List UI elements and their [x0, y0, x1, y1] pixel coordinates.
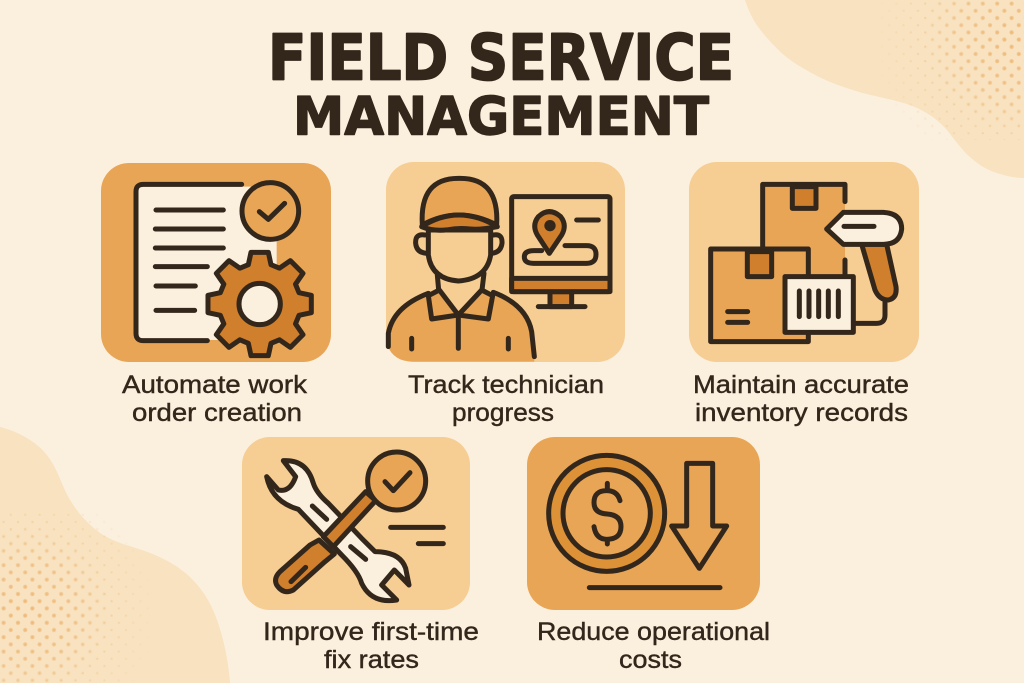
label 2 — [408, 371, 604, 427]
label 3: Maintain accurate — [693, 371, 909, 399]
label 4 — [263, 618, 479, 674]
label 5 — [537, 618, 770, 674]
tile 5 — [527, 437, 760, 610]
title: MANAGEMENT — [293, 86, 709, 148]
panel: maintain accurate inventory records — [689, 162, 919, 427]
label 2: Track technician — [408, 371, 604, 399]
label 5: Reduce operational — [537, 618, 770, 646]
label 3: inventory records — [695, 399, 908, 427]
label 1: order creation — [132, 399, 302, 427]
icon: wrench, screwdriver and check — [267, 452, 443, 601]
icon: dollar coin and down arrow — [549, 455, 727, 588]
tile 1 — [101, 163, 331, 362]
tile 3 — [689, 162, 919, 362]
tile 4 — [242, 437, 470, 610]
icon: boxes, barcode label and scanner — [711, 184, 902, 342]
icon: document with gear and check — [136, 183, 311, 356]
background blob: bottom left — [0, 427, 230, 683]
label 3 — [693, 371, 909, 427]
icon: technician and map monitor — [387, 178, 610, 362]
label 4: Improve first-time — [263, 618, 479, 646]
label 5: costs — [619, 646, 682, 674]
title — [268, 22, 734, 148]
panel: improve first-time fix rates — [242, 437, 479, 674]
label 2: progress — [452, 399, 554, 427]
label 1: Automate work — [122, 371, 308, 399]
title: FIELD SERVICE — [268, 22, 734, 94]
label 4: fix rates — [324, 646, 419, 674]
label 1 — [122, 371, 308, 427]
background blob: top right — [745, 0, 1024, 178]
panel: reduce operational costs — [527, 437, 770, 674]
panel: track technician progress — [386, 162, 625, 427]
panel: automate work order creation — [101, 163, 331, 427]
tile 2 — [386, 162, 625, 362]
